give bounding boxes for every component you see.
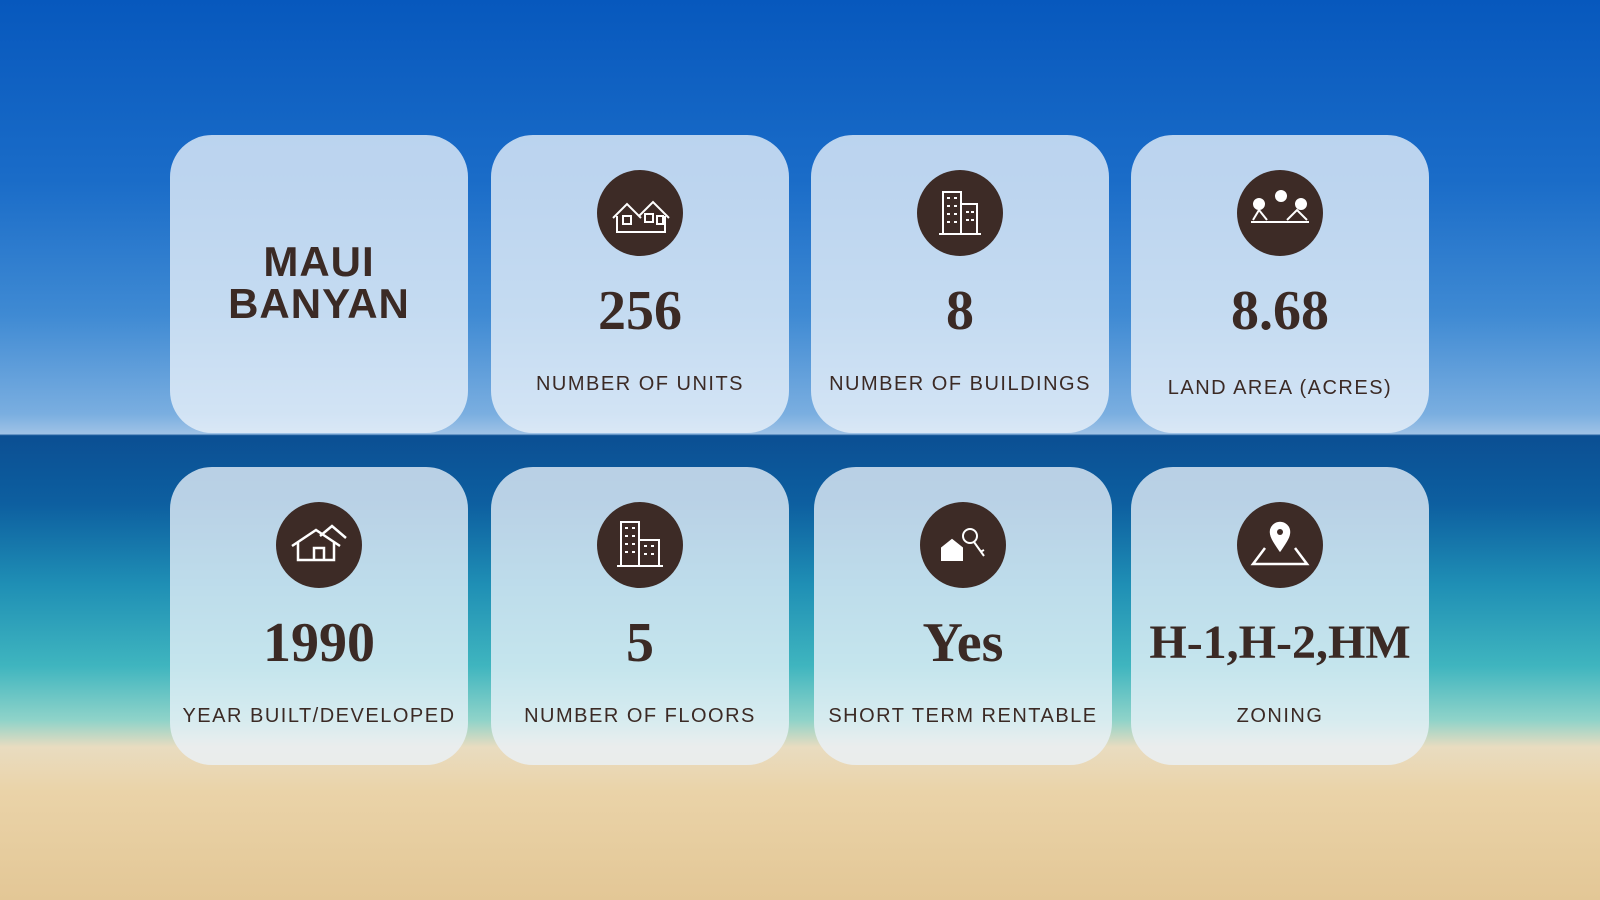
label: LAND AREA (ACRES) [1168,377,1392,399]
icon: houses [597,170,683,256]
card: floors [491,467,789,765]
icon: map pins [1237,170,1323,256]
icon: building [917,170,1003,256]
title: BANYAN [228,280,410,327]
number: H-1,H-2,HM [1149,616,1411,669]
icon: keys [920,502,1006,588]
number: 8.68 [1231,280,1329,342]
card: title [170,135,468,433]
card: units [491,135,789,433]
title: MAUI [263,238,375,285]
card: land area [1131,135,1429,433]
card: year [170,467,468,765]
card: buildings [811,135,1109,433]
number: 5 [626,612,654,674]
label: YEAR BUILT/DEVELOPED [182,705,456,727]
card: zoning [1131,467,1429,765]
title [228,238,410,327]
label: NUMBER OF BUILDINGS [829,373,1091,395]
label: ZONING [1237,705,1323,727]
card: short term [814,467,1112,765]
label: SHORT TERM RENTABLE [828,705,1098,727]
label: NUMBER OF FLOORS [524,705,756,727]
number: 256 [598,280,682,342]
icon: map pin [1237,502,1323,588]
number: Yes [923,612,1003,674]
icon: tower [597,502,683,588]
number: 8 [946,280,974,342]
label: NUMBER OF UNITS [536,373,744,395]
icon: house [276,502,362,588]
number: 1990 [263,612,375,674]
